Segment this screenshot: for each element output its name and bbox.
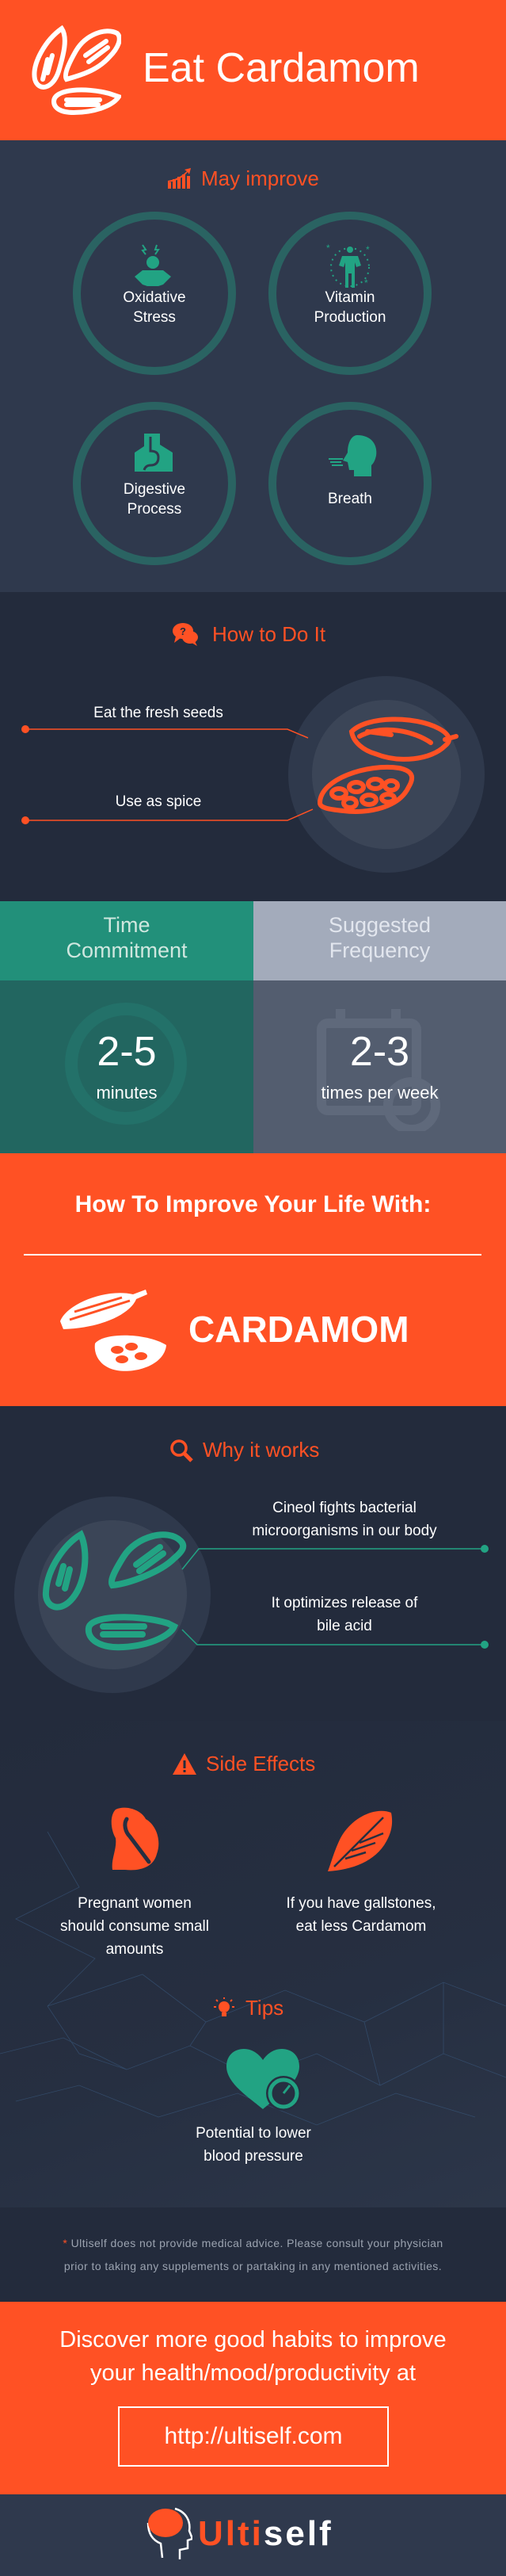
icon: faded clock	[65, 1003, 187, 1125]
panel: side effects and tips	[0, 1721, 506, 2207]
icon: leaf	[328, 1810, 393, 1871]
text: use as spice: Use as spice	[116, 793, 201, 810]
text: gallstones	[286, 1895, 436, 1935]
text: gallstones: eat less Cardamom	[296, 1918, 426, 1935]
disclaimer: prior to taking any supplements or partaking in any mentioned activities.	[64, 2260, 442, 2272]
text: pregnant women: should consume small	[60, 1918, 209, 1935]
text: blood pressure	[196, 2125, 311, 2165]
circle: green seeds illustration	[14, 1496, 211, 1693]
circle: digestive process	[73, 402, 236, 565]
cta text: your health/mood/productivity at	[90, 2360, 416, 2386]
value: 2-5 minutes: 2-5	[97, 1029, 157, 1075]
banner heading: How To Improve Your Life With:	[75, 1191, 431, 1217]
panel: why it works	[0, 1406, 506, 1721]
text: cineol fights bacteria	[252, 1500, 437, 1539]
connector line 1	[21, 725, 309, 739]
circle: vitamin production: *	[366, 244, 370, 255]
text: pregnant women: Pregnant women	[78, 1895, 192, 1912]
panel: suggested frequency: times per week	[321, 1083, 438, 1103]
panel: suggested frequency	[253, 901, 506, 1153]
circle: breath: Breath	[328, 491, 372, 507]
panel: may improve	[0, 140, 506, 592]
header banner	[0, 0, 506, 140]
circle: digestive process: Digestive	[124, 481, 185, 498]
icon: faded calendar	[317, 1009, 440, 1131]
connector line 2	[182, 1630, 489, 1649]
circle: vitamin production	[268, 212, 432, 375]
text: cineol fights bacteria: Cineol fights bacterial	[272, 1500, 417, 1516]
panel: time commitment: minutes	[96, 1083, 158, 1103]
heading: tips	[214, 1996, 283, 2020]
value: 2-3 times per week: 2-3	[350, 1029, 409, 1075]
text: pregnant women	[60, 1895, 209, 1958]
text: bile acid	[272, 1595, 418, 1634]
icon: brain head	[147, 2508, 192, 2559]
url button: http://ultiself.com	[164, 2423, 343, 2449]
decorative network	[0, 1831, 506, 2126]
circle: cardamom illustration	[288, 676, 485, 873]
heading: tips: Tips	[245, 1996, 283, 2020]
text: blood pressure: blood pressure	[204, 2148, 303, 2165]
circle: oxidative stress: Stress	[133, 309, 176, 326]
url button	[118, 2406, 389, 2467]
icon: cardamom pod white	[60, 1290, 166, 1371]
text: bile acid: bile acid	[317, 1618, 372, 1634]
connector line 1	[182, 1545, 489, 1569]
text: blood pressure: Potential to lower	[196, 2125, 311, 2142]
circle: breath	[268, 402, 432, 565]
text: pregnant women: amounts	[106, 1941, 163, 1958]
heading: why it works: Why it works	[203, 1438, 319, 1462]
icon: heart with gauge	[226, 2049, 299, 2111]
circle: digestive process: Process	[127, 501, 181, 518]
panel: time commitment	[0, 901, 253, 1153]
circle: vitamin production: Vitamin	[325, 289, 375, 306]
disclaimer	[0, 2207, 506, 2302]
connector line 2	[21, 808, 314, 824]
text: eat the fresh seeds: Eat the fresh seeds	[93, 705, 223, 721]
cta text: Discover more good habits to improve	[59, 2327, 447, 2352]
panel: how to do it	[0, 592, 506, 901]
banner: how to improve your life	[0, 1153, 506, 1406]
icon: pregnant woman	[111, 1807, 158, 1871]
heading: may improve: May improve	[201, 166, 319, 190]
header: time commitment	[0, 901, 253, 980]
header: time commitment: Time	[103, 913, 150, 937]
text: bile acid: It optimizes release of	[272, 1595, 417, 1611]
disclaimer: * Ultiself does not provide medical advice. Please consult your physician	[63, 2237, 443, 2249]
heading: side effects: Side Effects	[206, 1752, 315, 1775]
header: time commitment: Commitment	[66, 938, 188, 962]
icon: cardamom pods	[32, 25, 121, 115]
circle: oxidative stress: Oxidative	[123, 289, 186, 306]
heading: how to do it: How to Do It	[212, 622, 325, 646]
header: suggested frequency: Frequency	[329, 938, 430, 962]
header: suggested frequency	[253, 901, 506, 980]
heading: how to do it: ?	[180, 625, 186, 637]
banner title: cardamom: CARDAMOM	[188, 1309, 409, 1350]
header: suggested frequency: Suggested	[329, 913, 431, 937]
circle: oxidative stress	[73, 212, 236, 375]
logo wordmark: Ultiself	[198, 2514, 333, 2553]
circle: vitamin production: Production	[314, 309, 386, 326]
title: Eat Cardamom	[143, 45, 420, 91]
cta text	[59, 2327, 447, 2386]
text: gallstones: If you have gallstones,	[286, 1895, 436, 1912]
footer logo	[0, 2494, 506, 2576]
call to action	[0, 2302, 506, 2494]
text: cineol fights bacteria: microorganisms in our body	[252, 1523, 437, 1539]
